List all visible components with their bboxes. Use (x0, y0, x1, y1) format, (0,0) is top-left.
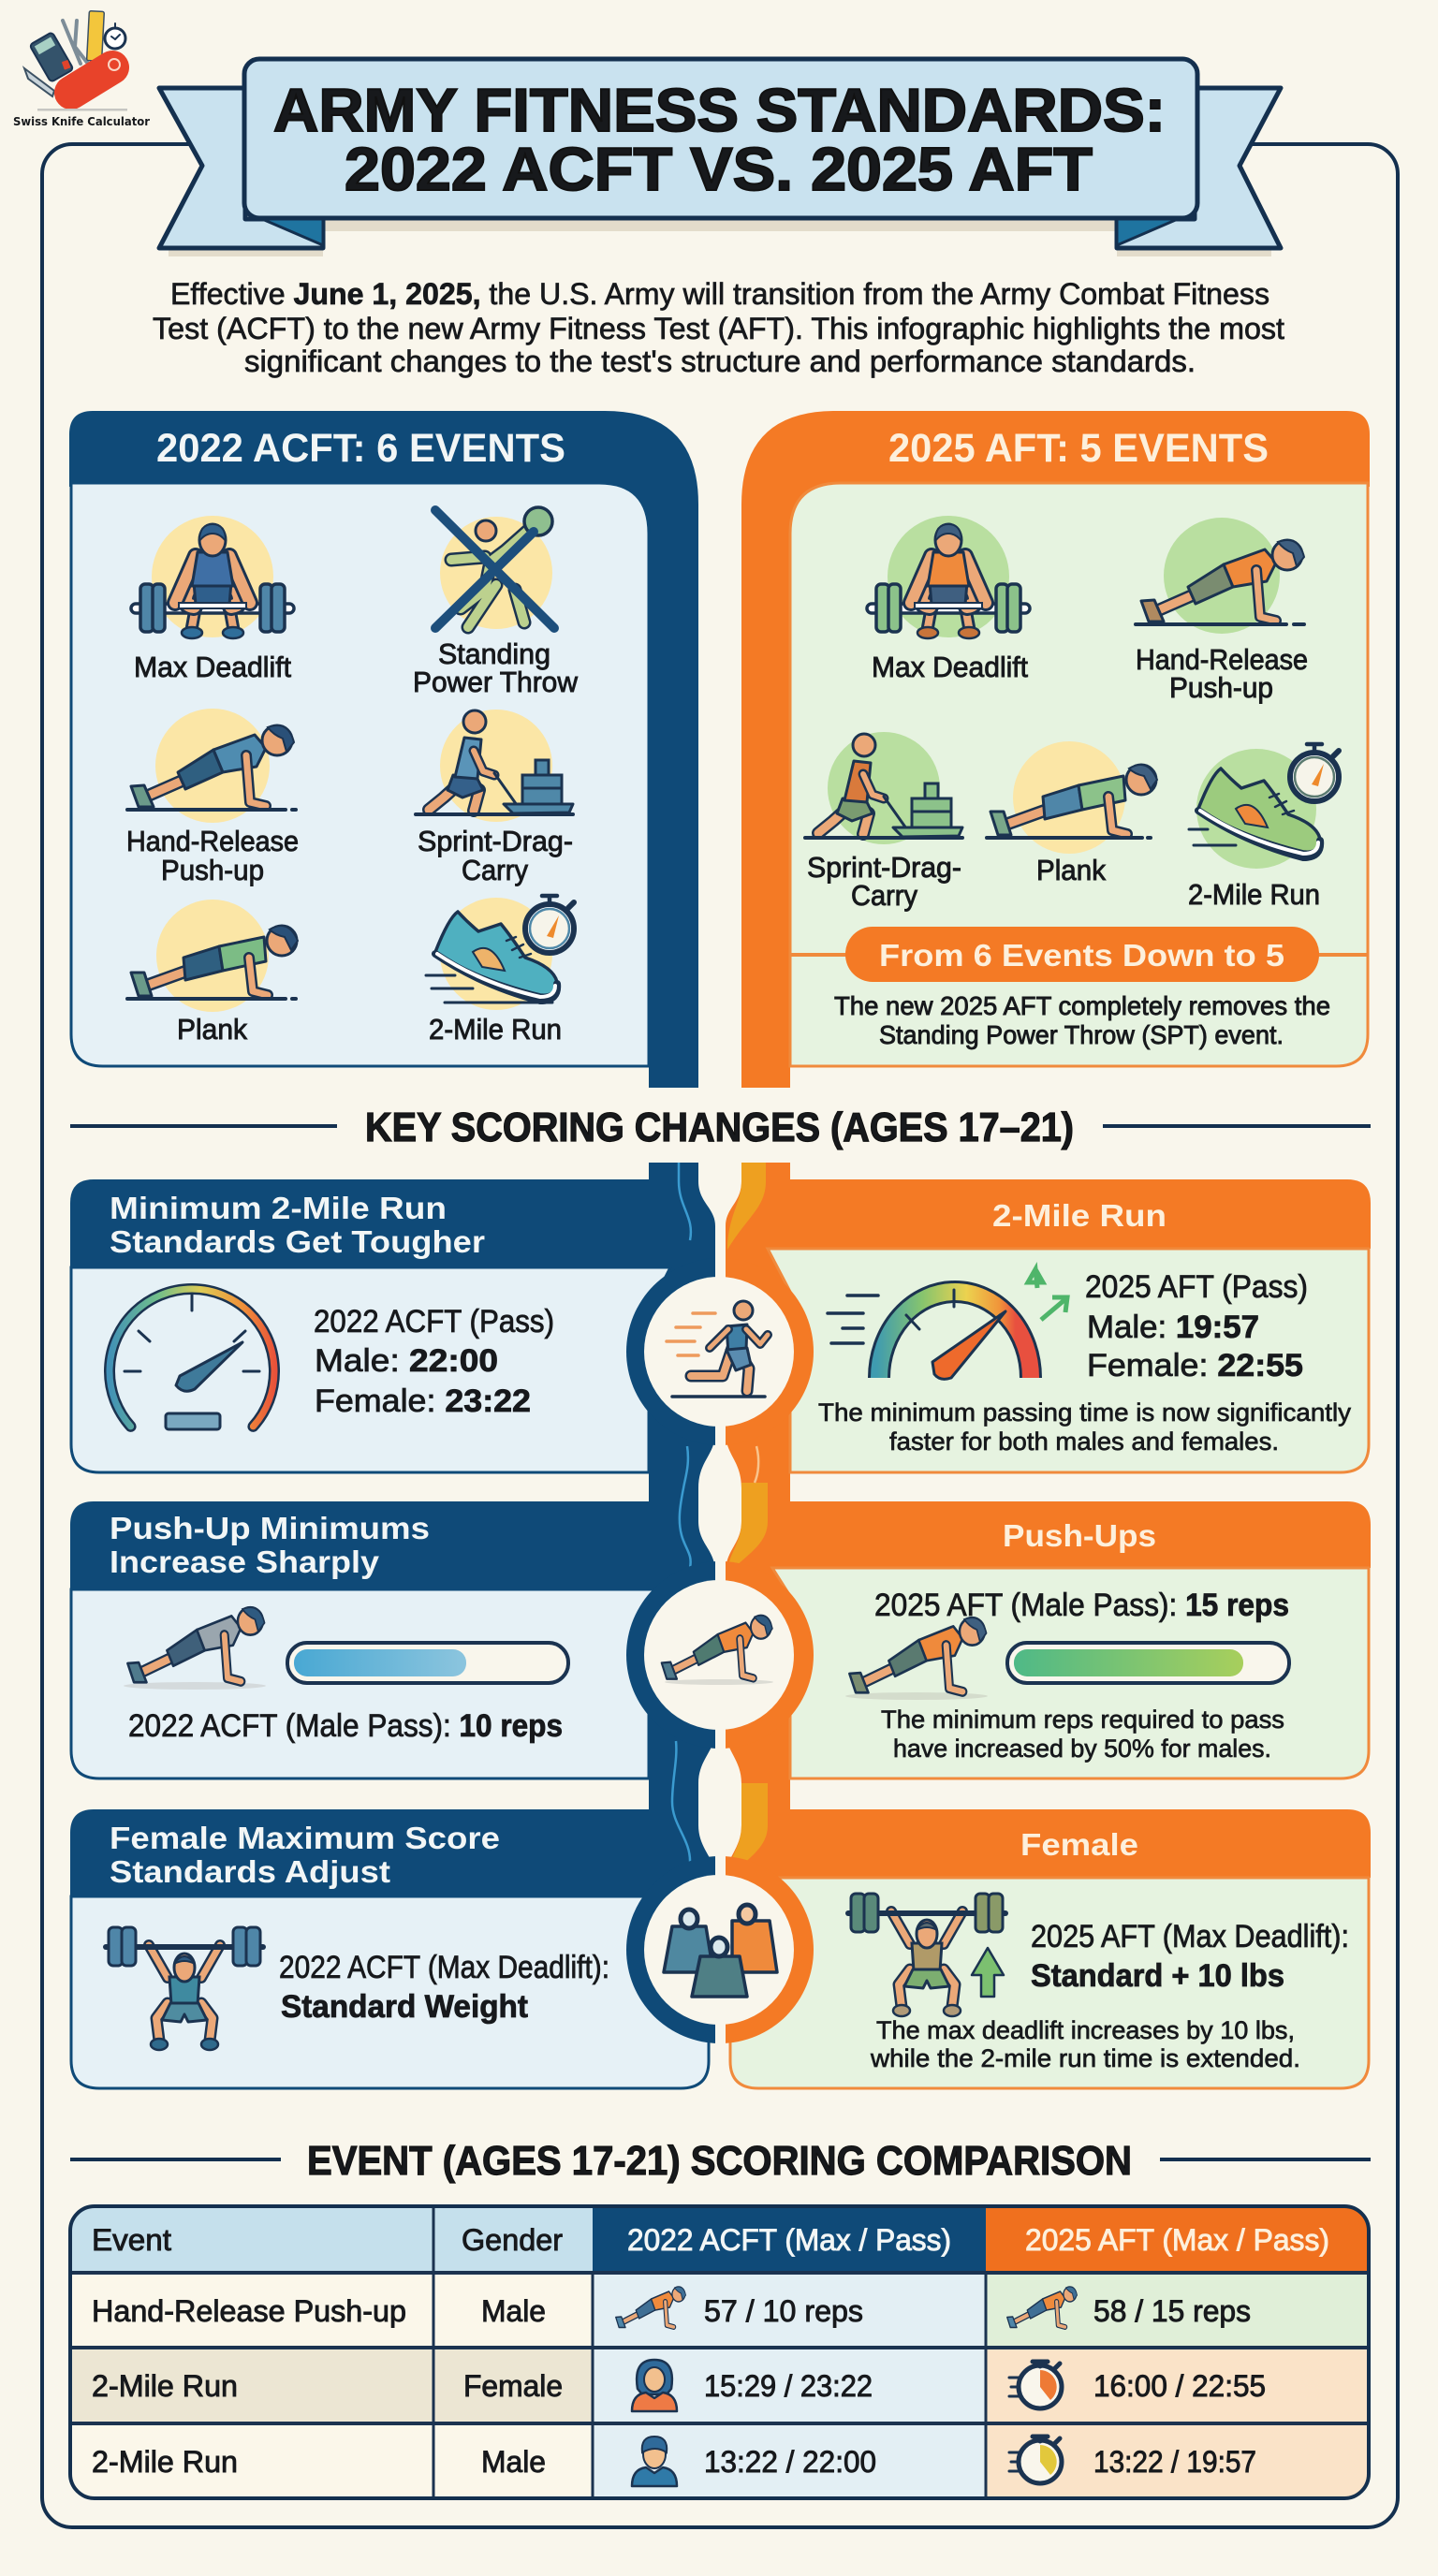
label: hand-release push-up: Hand-Release (126, 825, 299, 857)
heading: event scoring comparison (70, 2138, 1371, 2184)
icon: sprint-drag-carry (416, 710, 573, 822)
row: 2-mile run male: 13:22 / 22:00 (704, 2445, 876, 2479)
table header row: 2022 ACFT (Max / Pass) (627, 2223, 951, 2257)
icon: 2-mile run shoe and stopwatch (426, 896, 574, 1010)
stats: 2025 run: Female: 22:55 (1087, 1348, 1303, 1383)
note: push-ups (881, 1705, 1284, 1763)
row: 2-mile run male: Male (481, 2445, 546, 2479)
panel: 2025 AFT 5 events (741, 411, 1370, 1088)
label: sprint-drag-carry: Sprint-Drag- (807, 851, 961, 884)
icon: female avatar (632, 2360, 677, 2411)
icon: push-up (124, 1607, 266, 1690)
icon: push-up in connector (662, 1616, 773, 1685)
heading: event scoring comparison: EVENT (AGES 17-21) SCORING COMPARISON (307, 2138, 1132, 2184)
progress bar: 15 reps (1007, 1643, 1289, 1683)
note: female (870, 2016, 1300, 2072)
stat: 2025 push-ups: 2025 AFT (Male Pass): 15 reps (874, 1588, 1289, 1623)
label: max deadlift: Max Deadlift (134, 651, 291, 683)
icon: three weights (664, 1905, 777, 1997)
stats: 2022 run: Male: 22:00 (315, 1343, 498, 1379)
stats: 2022 run: Female: 23:22 (315, 1383, 531, 1419)
stats: 2025 run: Male: 19:57 (1087, 1310, 1259, 1345)
label: hand-release push-up (1136, 643, 1308, 704)
callout: from 6 events down to 5 (790, 927, 1368, 982)
central connector: blue side (649, 1163, 715, 1910)
callout: from 6 events down to 5: From 6 Events Down to 5 (879, 938, 1284, 973)
note: female: The max deadlift increases by 10 lbs, (876, 2016, 1295, 2044)
label: hand-release push-up: Push-up (1169, 671, 1273, 704)
note: run (818, 1398, 1352, 1456)
note: SPT removed: The new 2025 AFT completely removes the (834, 991, 1330, 1020)
card heading (110, 1821, 500, 1889)
stats: 2025 run: 2025 AFT (Pass) (1085, 1269, 1308, 1305)
label: plank: Plank (1036, 854, 1106, 886)
logo: Swiss Knife Calculator (13, 11, 150, 128)
intro paragraph: significant changes to the test's structure and performance standards. (244, 344, 1196, 378)
label: sprint-drag-carry (807, 851, 961, 912)
note: push-ups: have increased by 50% for males. (893, 1734, 1271, 1763)
icon: small push-up (1007, 2287, 1078, 2327)
title text (273, 76, 1166, 203)
note: SPT removed (834, 991, 1330, 1049)
icon: stopwatch (1009, 2437, 1062, 2483)
card heading: Minimum 2-Mile Run (110, 1191, 447, 1225)
stat: 2022 push-ups: 2022 ACFT (Male Pass): 10 reps (128, 1708, 563, 1744)
comparison table (70, 2206, 1369, 2498)
card: 2022 minimum 2-mile run (70, 1179, 670, 1472)
card heading (110, 1191, 485, 1259)
row: 2-mile run female: 16:00 / 22:55 (1093, 2369, 1266, 2403)
row: 2-mile run female: 15:29 / 23:22 (704, 2369, 873, 2403)
connector rings (626, 1258, 814, 2043)
label: max deadlift: Max Deadlift (872, 651, 1028, 683)
card heading (110, 1511, 430, 1579)
icon: plank (127, 900, 298, 1012)
row: 2-mile run female (92, 2360, 1266, 2411)
icon: sprint-drag-carry (805, 732, 962, 844)
note: run: The minimum passing time is now significantly (818, 1398, 1352, 1427)
stat: 2022 max deadlift: Standard Weight (281, 1989, 528, 2025)
icon: male avatar (632, 2437, 677, 2486)
card heading: Standards Get Tougher (110, 1224, 485, 1259)
icon: small push-up (616, 2287, 686, 2327)
label: 2-mile run: 2-Mile Run (1188, 878, 1320, 911)
card heading: 2-Mile Run (992, 1198, 1167, 1233)
label: sprint-drag-carry: Carry (462, 854, 528, 886)
card heading: Increase Sharply (110, 1544, 380, 1579)
stats: 2022 run: 2022 ACFT (Pass) (314, 1304, 554, 1339)
title text: 2022 ACFT VS. 2025 AFT (345, 135, 1093, 203)
card: 2025 female (730, 1809, 1371, 2088)
gauge: 2025 (828, 1269, 1067, 1379)
icon: push-up (845, 1617, 988, 1700)
card: 2025 2-mile run (768, 1179, 1371, 1472)
intro paragraph: Test (ACFT) to the new Army Fitness Test (AFT). This infographic highlights the most (153, 312, 1284, 345)
label: sprint-drag-carry: Sprint-Drag- (418, 825, 573, 857)
stat: 2025 max deadlift: Standard + 10 lbs (1031, 1958, 1284, 1994)
note: female: while the 2-mile run time is extended. (870, 2044, 1300, 2072)
intro paragraph (153, 277, 1284, 378)
label: plank: Plank (177, 1013, 247, 1046)
gauge: 2022 (110, 1289, 274, 1429)
icon: runner (667, 1301, 768, 1397)
card heading: Female Maximum Score (110, 1821, 500, 1855)
icon: hand-release push-up (1136, 518, 1304, 634)
row: 2-mile run female: 2-Mile Run (92, 2369, 238, 2403)
icon: standing power throw crossed out (435, 507, 554, 629)
row: hand-release push-up male: Hand-Release Push-up (92, 2294, 406, 2328)
title text: ARMY FITNESS STANDARDS: (273, 76, 1166, 144)
icon: plank (987, 741, 1157, 854)
label: standing power throw (413, 637, 579, 698)
card: 2022 push-up minimums (70, 1501, 670, 1778)
card heading: Standards Adjust (110, 1854, 390, 1889)
table header row: 2025 AFT (Max / Pass) (1025, 2223, 1329, 2257)
stat: 2022 max deadlift (279, 1950, 609, 2025)
stat: 2025 max deadlift: 2025 AFT (Max Deadlift): (1031, 1919, 1349, 1954)
stat: 2022 max deadlift: 2022 ACFT (Max Deadlift): (279, 1950, 609, 1985)
stats: 2025 run (1085, 1269, 1308, 1383)
title banner (159, 59, 1281, 256)
icon: overhead lift (103, 1927, 266, 2050)
icon: 2-mile run shoe and stopwatch (1189, 744, 1339, 869)
label: sprint-drag-carry (418, 825, 573, 886)
panel heading: 2022 ACFT: 6 EVENTS (156, 426, 565, 471)
panel: 2022 ACFT 6 events (69, 411, 698, 1088)
row: hand-release push-up male: 57 / 10 reps (704, 2294, 863, 2328)
icon: max deadlift (867, 516, 1030, 638)
table header row (92, 2223, 1329, 2257)
note: SPT removed: Standing Power Throw (SPT) event. (879, 1020, 1284, 1049)
heading: key scoring changes (70, 1105, 1371, 1150)
progress bar: 10 reps (287, 1643, 568, 1683)
logo: Swiss Knife Calculator: Swiss Knife Calculator (13, 115, 150, 128)
note: push-ups: The minimum reps required to pass (881, 1705, 1284, 1734)
card heading: Push-Ups (1003, 1518, 1156, 1553)
row: 2-mile run male: 13:22 / 19:57 (1093, 2445, 1256, 2479)
icon: stopwatch (1009, 2362, 1062, 2408)
card: 2022 female maximum score (70, 1809, 709, 2088)
row: hand-release push-up male (92, 2287, 1251, 2328)
stats: 2022 run (314, 1304, 554, 1419)
row: 2-mile run female: Female (463, 2369, 563, 2403)
row: hand-release push-up male: 58 / 15 reps (1093, 2294, 1251, 2328)
icon: max deadlift (131, 516, 294, 638)
icon: hand-release push-up (127, 709, 296, 823)
table header row: Event (92, 2223, 171, 2257)
label: 2-mile run: 2-Mile Run (429, 1013, 562, 1046)
label: sprint-drag-carry: Carry (851, 879, 917, 912)
note: run: faster for both males and females. (889, 1427, 1279, 1456)
central connector: orange side (726, 1163, 790, 1891)
icon: overhead lift with up arrow (845, 1894, 1008, 2016)
card heading: Push-Up Minimums (110, 1511, 430, 1545)
label: hand-release push-up: Push-up (161, 854, 264, 886)
row: hand-release push-up male: Male (481, 2294, 546, 2328)
table header row: Gender (462, 2223, 563, 2257)
card heading: Female (1020, 1827, 1138, 1862)
label: standing power throw: Standing (438, 637, 550, 670)
stat: 2025 max deadlift (1031, 1919, 1349, 1994)
intro paragraph: Effective June 1, 2025, the U.S. Army will transition from the Army Combat Fitness (170, 277, 1269, 311)
label: hand-release push-up (126, 825, 299, 886)
label: hand-release push-up: Hand-Release (1136, 643, 1308, 676)
heading: key scoring changes: KEY SCORING CHANGES (AGES 17–21) (365, 1105, 1074, 1150)
row: 2-mile run male (92, 2437, 1256, 2486)
row: 2-mile run male: 2-Mile Run (92, 2445, 238, 2479)
label: standing power throw: Power Throw (413, 666, 579, 698)
panel heading: 2025 AFT: 5 EVENTS (888, 426, 1269, 471)
card: 2025 push-ups (772, 1501, 1371, 1778)
